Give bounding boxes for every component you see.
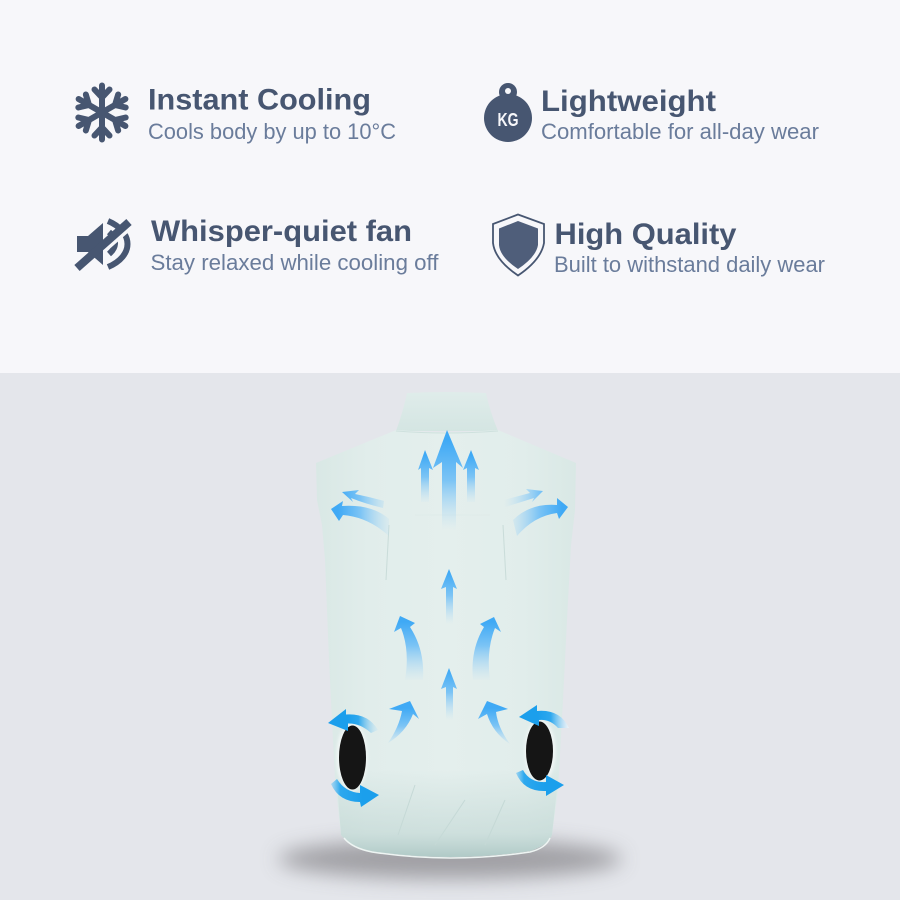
vest hem edge: [344, 838, 550, 858]
arrow: shoulder right upper: [500, 489, 543, 508]
feature: High Quality: [493, 214, 825, 277]
arrow: fan right top: [519, 705, 569, 728]
bottom panel background: [0, 373, 900, 900]
heading: Lightweight: Lightweight: [541, 85, 716, 118]
icon: muted speaker: [77, 221, 132, 268]
heading: High Quality: High Quality: [554, 218, 737, 251]
arrow: lower left diagonal: [388, 701, 419, 743]
arrow: shoulder right lower: [513, 498, 568, 536]
arrow: center up large: [433, 430, 463, 530]
fan: right: [524, 720, 556, 782]
ground shadow: [278, 839, 622, 879]
arrow: upper left up: [418, 450, 433, 502]
feature: Whisper-quiet fan: [77, 215, 439, 275]
feature: Lightweight: [484, 83, 819, 144]
vest seams and wrinkles: [386, 431, 506, 845]
text: cooling description: Cools body by up to 10°C: [148, 119, 396, 144]
arrow: fan right bottom: [516, 770, 564, 796]
fan: left: [336, 723, 368, 791]
vest hem shading: [336, 770, 559, 857]
arrow: shoulder left upper: [342, 490, 384, 508]
arrow: lower right diagonal: [478, 701, 510, 744]
top panel background: [0, 0, 900, 373]
arrow: fan left bottom: [331, 779, 379, 807]
arrow: center up middle: [441, 569, 457, 624]
text: lightweight description: Comfortable for all-day wear: [541, 119, 819, 144]
heading: Instant Cooling: Instant Cooling: [148, 84, 371, 116]
arrow: fan left top: [328, 709, 378, 733]
arrow: left curved middle: [394, 616, 423, 680]
vest body: [316, 430, 576, 857]
arrow: shoulder left lower: [331, 501, 389, 536]
icon: snowflake: [75, 86, 129, 140]
vest collar: [396, 392, 498, 431]
arrow: upper right up: [463, 450, 479, 502]
arrow: center up lower: [441, 668, 457, 720]
feature: Instant Cooling: [75, 84, 396, 144]
icon: kg weight: KG: [498, 110, 518, 130]
heading: Whisper-quiet fan: Whisper-quiet fan: [151, 215, 412, 248]
text: quality description: Built to withstand daily wear: [554, 252, 825, 277]
arrow: right curved middle: [472, 617, 501, 680]
text: whisper description: Stay relaxed while cooling off: [150, 250, 439, 275]
icon: shield: [493, 214, 544, 276]
airflow arrows: [328, 430, 569, 807]
icon: kg weight: [484, 83, 532, 142]
vest illustration: [316, 392, 576, 858]
